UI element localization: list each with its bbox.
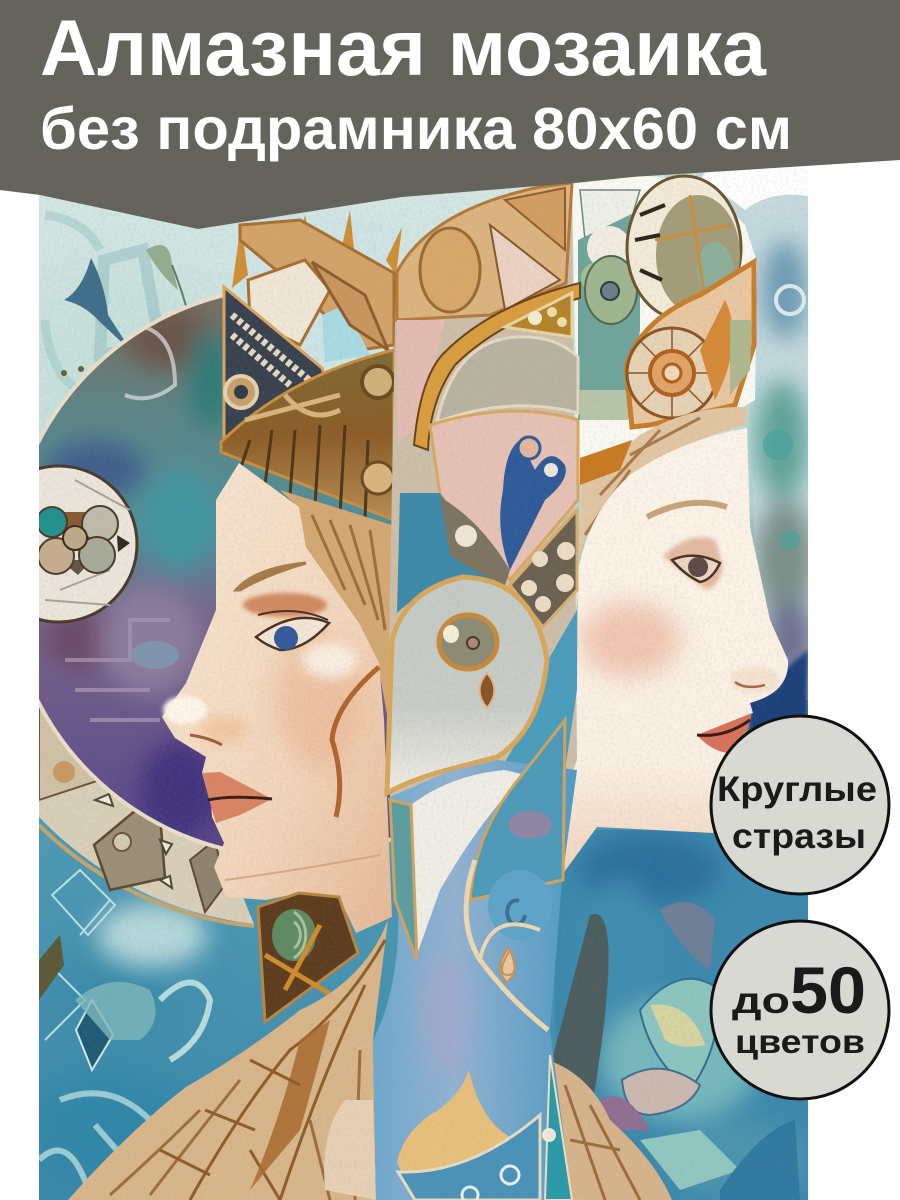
left eye xyxy=(236,563,329,650)
lower left blue water pattern xyxy=(39,870,210,1195)
grey dome xyxy=(437,337,578,422)
left hair xyxy=(280,490,392,720)
left lips xyxy=(202,772,272,823)
moon ornamental band xyxy=(39,708,254,928)
left braid xyxy=(68,920,388,1200)
right braid xyxy=(548,1060,672,1200)
badge: up to 50 colours: до xyxy=(732,980,790,1021)
left crown xyxy=(221,210,402,520)
centre large pearl shape with eye xyxy=(387,577,547,793)
pale cloud in lower left water xyxy=(97,903,207,967)
hair curl xyxy=(332,667,379,817)
dotted pod xyxy=(510,510,577,627)
blue feathers xyxy=(500,440,566,570)
painting background wash xyxy=(39,150,808,1200)
painting: two women in profile xyxy=(0,150,816,1200)
centre panel with arched ornaments xyxy=(387,183,580,830)
badge: round rhinestones: Круглые xyxy=(717,770,877,809)
right background pattern xyxy=(663,166,808,732)
gold arch band xyxy=(414,283,580,450)
badge: round rhinestones xyxy=(711,716,889,894)
badge: round rhinestones: стразы xyxy=(732,817,866,856)
brown seed pod xyxy=(440,497,510,585)
right lips xyxy=(697,713,752,753)
golden bell at scarf hem xyxy=(397,1055,572,1200)
blue foliage, lower right xyxy=(553,828,808,1200)
paper grain texture xyxy=(39,150,808,1200)
header banner xyxy=(0,0,900,229)
spiral shell ornament xyxy=(626,262,754,427)
pink feather panel xyxy=(430,411,578,580)
pink left strip xyxy=(397,320,445,440)
gold lattice triangle xyxy=(505,293,572,337)
right eye xyxy=(647,503,727,590)
centre blue scarf xyxy=(373,720,577,1200)
teal shoulder xyxy=(397,493,500,613)
decorative leaf sprigs xyxy=(45,215,190,400)
right hair xyxy=(578,407,747,560)
left face xyxy=(162,463,392,933)
blue side strip xyxy=(506,610,577,764)
left neck ornament xyxy=(258,893,358,1022)
badge: up to 50 colours: 50 xyxy=(790,953,866,1027)
title: Алмазная мозаика xyxy=(40,3,767,92)
purple moon disc xyxy=(7,287,577,857)
ornamental medallion xyxy=(39,464,138,624)
right crown xyxy=(572,176,757,480)
subtitle: без подрамника 80х60 см xyxy=(40,96,792,162)
right face xyxy=(562,428,788,875)
badge: up to 50 colours: цветов xyxy=(735,1023,865,1060)
badge: up to 50 colours xyxy=(711,921,889,1099)
upper arch leaves xyxy=(397,183,572,320)
